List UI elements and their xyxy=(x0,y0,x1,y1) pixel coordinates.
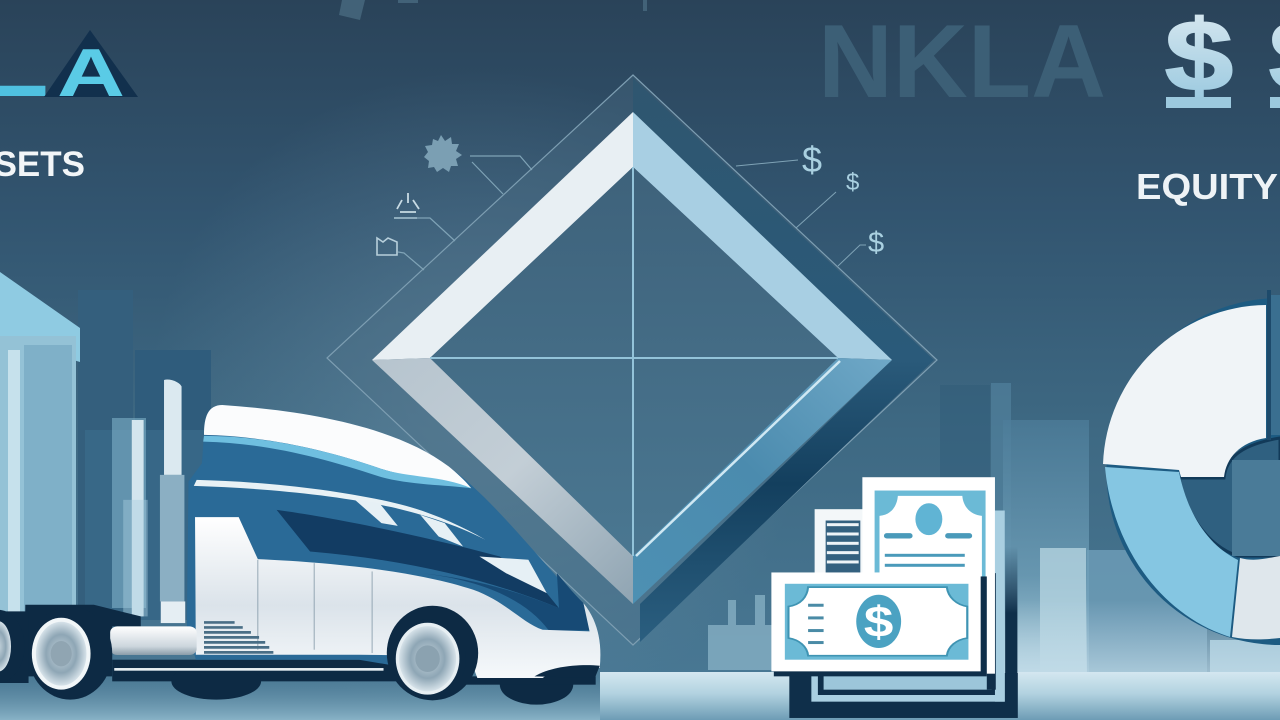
icon: dollar seal: $ xyxy=(864,599,894,647)
icon: dollar seal xyxy=(856,595,901,648)
logo: NKLA top-left xyxy=(0,14,138,116)
certificate xyxy=(862,477,995,674)
hole xyxy=(1179,438,1280,556)
pane: bottom left xyxy=(372,358,633,604)
segment: blue xyxy=(1105,467,1238,637)
back sheet xyxy=(811,511,1005,702)
ring outline xyxy=(1106,298,1280,645)
equity ring chart xyxy=(1103,290,1280,645)
door seams xyxy=(258,560,372,653)
side window xyxy=(277,510,559,608)
heading: equity: EQUITY xyxy=(1136,166,1278,207)
chassis xyxy=(0,605,596,705)
money documents xyxy=(771,477,1018,718)
centre panel xyxy=(430,167,838,556)
white belt line xyxy=(194,480,486,540)
truck xyxy=(0,380,600,705)
hole city xyxy=(1232,460,1280,556)
pane: top left xyxy=(372,112,633,360)
floor xyxy=(0,660,1280,720)
banknote xyxy=(771,572,987,676)
grille lines xyxy=(204,622,273,652)
icon: gear xyxy=(424,135,532,194)
segment: grey xyxy=(1232,556,1280,639)
icon: dollar 3 xyxy=(838,227,884,266)
highlight edge xyxy=(636,361,840,556)
segment: white xyxy=(1103,305,1266,477)
icon: dollar 1: $ xyxy=(802,139,822,180)
connector icons: asset side xyxy=(377,135,532,270)
wheel: rear xyxy=(28,606,112,700)
cross lines xyxy=(430,167,838,556)
icon: dollar 2: $ xyxy=(846,169,859,196)
icon: wind turbine xyxy=(394,193,455,241)
exhaust stacks xyxy=(123,380,185,623)
roof white xyxy=(204,405,471,488)
nose navy panel xyxy=(420,573,590,630)
pane: bottom right xyxy=(633,358,892,604)
city skyline: left xyxy=(0,272,211,621)
connector icons: equity side xyxy=(736,139,884,266)
ship silhouette xyxy=(708,595,778,670)
cab body xyxy=(187,405,600,668)
bumper intake xyxy=(534,665,600,678)
wheel: front xyxy=(387,606,478,700)
wheel: far rear xyxy=(0,610,24,683)
icon: factory xyxy=(377,238,424,270)
dark base xyxy=(789,673,1018,718)
window slats xyxy=(355,500,547,593)
icon: dollar 2 xyxy=(796,169,859,228)
dark column xyxy=(1005,546,1017,680)
building: glass tower xyxy=(0,272,80,621)
pane: top right xyxy=(633,112,892,360)
icon: dollar 1 xyxy=(736,139,822,180)
faded top fragments xyxy=(339,0,647,20)
outer outline and shadow xyxy=(327,75,937,645)
icon: dollar 3: $ xyxy=(868,227,884,259)
divider xyxy=(1267,290,1271,440)
fuel tube xyxy=(110,626,197,655)
watermark: NKLA: NKLA xyxy=(818,4,1106,120)
document with lines xyxy=(815,509,864,574)
logo: NKLA top-left: A xyxy=(57,35,125,111)
icon: large dollar signs xyxy=(1165,0,1280,112)
diamond chart xyxy=(327,75,937,645)
lower body white xyxy=(195,517,600,678)
icon: large dollar signs: $ xyxy=(1165,0,1233,112)
faint tall tower right of diamond xyxy=(940,383,1011,685)
city skyline: right xyxy=(1003,420,1280,680)
roof stripe xyxy=(203,436,471,488)
